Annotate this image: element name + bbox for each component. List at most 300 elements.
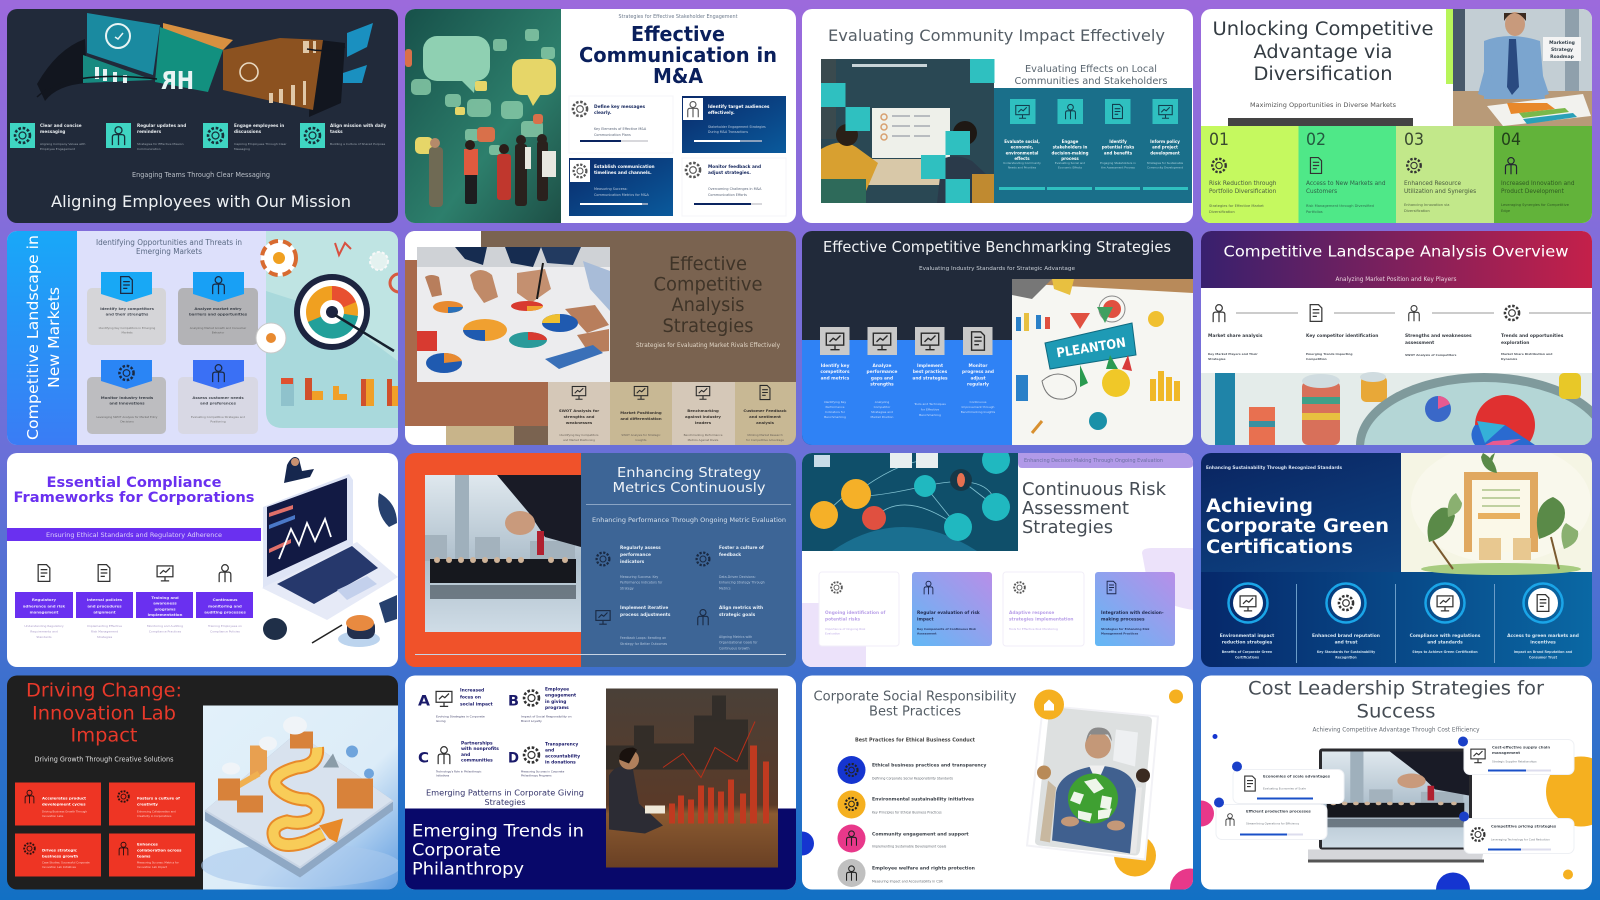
panel: four red action boxes xyxy=(15,782,195,876)
vertical title strip xyxy=(7,231,77,445)
row of four icon items: discussions xyxy=(234,129,262,134)
panel: identify target audiences xyxy=(682,96,786,153)
subheading: Best Practices for Ethical Business Conduct xyxy=(855,738,976,744)
panel: four evaluation items: Engage xyxy=(1062,139,1078,144)
item C xyxy=(418,740,499,778)
subtitle: Strategies for Evaluating Market Rivals Effectively xyxy=(636,342,780,349)
item D: and xyxy=(545,748,554,754)
four benchmarking items: and strategies xyxy=(912,375,948,381)
title: Effective xyxy=(631,22,725,46)
item D: in donations xyxy=(545,760,576,766)
four certification items: and standards xyxy=(1427,640,1463,646)
title: Cost Leadership Strategies for xyxy=(1248,678,1544,700)
four analysis columns: Identifying Key Competitors xyxy=(560,433,598,437)
panel: assess customer needs xyxy=(178,360,258,434)
title: Communication in xyxy=(579,43,777,67)
four metric items: Measuring Success: Key xyxy=(620,575,658,579)
four benchmarking items: gaps and xyxy=(871,375,893,381)
panel: four evaluation items: and project xyxy=(1152,145,1178,150)
image: bent ribbon of teal and brown blocks xyxy=(37,13,373,117)
four metric items: Align metrics with xyxy=(719,606,763,611)
title: Continuous Risk xyxy=(1022,479,1167,500)
callout: competitive pricing: Leveraging Technology for Cost Reduction xyxy=(1491,838,1550,842)
four certification items: and trust xyxy=(1335,640,1357,646)
callout: competitive pricing xyxy=(1459,812,1574,854)
column 04: Increased Innovation and xyxy=(1501,181,1574,187)
title: Philanthropy xyxy=(412,860,524,878)
panel: four red action boxes: business growth xyxy=(42,854,78,858)
item B: in giving xyxy=(545,699,566,705)
panel: four evaluation items: Identify xyxy=(1109,139,1127,144)
title: Driving Change: xyxy=(26,680,182,702)
subtitle: Achieving Competitive Advantage Through Cost Efficiency xyxy=(1312,726,1480,734)
subtitle: Enhancing Performance Through Ongoing Metric Evaluation xyxy=(592,516,786,524)
item A: social impact xyxy=(460,702,493,708)
row of four icon items: messaging xyxy=(40,129,65,134)
four metric items: Enhancing Strategy Through xyxy=(719,581,765,585)
item C: Partnerships xyxy=(461,742,493,746)
four compliance items: Regulatory xyxy=(32,597,56,602)
list of four practices: Defining Corporate Social Responsibility Standards xyxy=(872,776,953,780)
card: Continuous Risk Assessment Strategies xyxy=(802,446,1193,667)
column 04: 04 xyxy=(1501,130,1521,150)
image: network of icon bubbles xyxy=(802,446,1018,551)
panel: integration: making processes xyxy=(1101,616,1145,622)
panel: four red action boxes: Enhancing Collaboration and xyxy=(137,810,176,814)
four benchmarking items: Benchmarking xyxy=(919,413,941,417)
four benchmarking items: Market Position xyxy=(871,415,894,419)
subheading: Communities and Stakeholders xyxy=(1014,76,1168,87)
panel: identify target audiences: During M&A Transactions xyxy=(708,130,748,134)
photo: hands over pie charts xyxy=(417,247,610,382)
panel: four evaluation items: Evaluating Social and xyxy=(1055,161,1085,165)
row of four icon items: Communication xyxy=(137,147,161,151)
four certification items: Enhanced brand reputation xyxy=(1312,634,1380,639)
panel: four red action boxes: Innovation Lab Initiatives xyxy=(42,865,77,869)
panel: define key messages: Define key messages xyxy=(594,105,645,110)
four compliance items: and procedures xyxy=(87,603,122,608)
four benchmarking items: strengths xyxy=(870,382,894,388)
four compliance items: monitoring and xyxy=(208,603,242,608)
panel: monitor feedback: Overcoming Challenges in M&A xyxy=(708,187,762,191)
photo: man overlooking red bar city xyxy=(606,688,778,868)
callout: economies of scale: Evaluating Economies of Scale xyxy=(1263,786,1306,790)
title: Assessment xyxy=(1022,498,1129,519)
four metric items: feedback xyxy=(719,552,741,558)
column 02: Portfolios xyxy=(1306,210,1323,214)
four analysis columns: strengths and xyxy=(564,414,595,419)
panel: four red action boxes: Enhances xyxy=(137,842,158,846)
title: Essential Compliance xyxy=(46,475,222,491)
item C: Technology's Role in Philanthropic xyxy=(436,770,482,774)
four analysis columns: Benchmarking Performance xyxy=(684,433,722,437)
four benchmarking items: progress and xyxy=(962,369,994,375)
card: Achieving Corporate Green Certifications xyxy=(1201,443,1592,667)
timeline of four items: Key competitor identification xyxy=(1306,333,1378,339)
four certification items: Compliance with regulations xyxy=(1410,634,1480,639)
panel: integration xyxy=(1095,572,1175,646)
panel: regular evaluation: Key Components of Continuous Risk xyxy=(917,627,976,631)
panel: regular evaluation: Assessment xyxy=(917,632,937,636)
panel: four red action boxes: Drives strategic xyxy=(42,848,77,852)
list of four practices xyxy=(838,756,986,887)
four metric items: Data-Driven Decisions: xyxy=(719,575,756,579)
panel: monitor industry trends: Leveraging SWOT Analysis for Market Entry xyxy=(97,415,157,419)
item D xyxy=(508,742,580,778)
four benchmarking items: Identify key xyxy=(821,364,849,369)
four compliance items: Internal policies xyxy=(87,597,122,602)
four benchmarking items: Tools and Techniques xyxy=(914,402,946,406)
item C: communities xyxy=(461,758,493,764)
four benchmarking items: Strategies and xyxy=(871,410,893,414)
row of four icon items xyxy=(10,123,387,151)
panel: four red action boxes: Accelerates product xyxy=(42,796,86,800)
panel: four evaluation items: Strategies for Sustainable xyxy=(1147,161,1183,165)
column 03: Utilization and Synergies xyxy=(1404,189,1476,195)
top banner: Enhancing Decision-Making Through Ongoing Evaluation xyxy=(1024,458,1163,464)
panel: establish communication timelines: timelines and channels. xyxy=(594,170,652,176)
title: Corporate Social Responsibility xyxy=(814,690,1017,704)
four benchmarking items: Improvement through xyxy=(962,405,995,409)
panel: four evaluation items: the Assessment Process xyxy=(1101,165,1135,169)
panel: define key messages: Key Elements of Effective M&A xyxy=(594,127,646,131)
title: Competitive xyxy=(654,274,762,296)
column 02 xyxy=(1298,126,1396,223)
panel: four red action boxes: Innovation Labs xyxy=(42,814,64,818)
title: Analysis xyxy=(672,294,744,316)
card: Competitive Landscape Analysis Overview xyxy=(1201,231,1600,517)
subtitle: Driving Growth Through Creative Solutions xyxy=(34,756,174,764)
item B: Employee xyxy=(545,688,569,692)
panel: four red action boxes: Driving Business Growth Through xyxy=(42,810,87,814)
four metric items: strategic goals xyxy=(719,612,756,618)
four benchmarking items: Indicators for xyxy=(825,410,846,414)
timeline of four items xyxy=(1208,305,1591,361)
four metric items: performance xyxy=(620,552,651,558)
panel: adaptive response: Adaptive response xyxy=(1009,611,1054,616)
callout: efficient production: Streamlining Operations for Efficiency xyxy=(1246,822,1299,826)
panel: adaptive response xyxy=(1003,572,1084,646)
panel: ongoing identification: Importance of Ongoing Risk xyxy=(825,627,865,631)
badge: home icon xyxy=(1034,690,1064,720)
four benchmarking items: Identifying Key xyxy=(824,400,846,404)
four metric items: Regularly assess xyxy=(620,546,661,551)
four analysis columns: SWOT Analysis for Strategic xyxy=(621,433,661,437)
callout: supply chain: Strategic Supplier Relationships xyxy=(1492,760,1537,764)
title xyxy=(1214,20,1432,80)
image: whiteboard mind map with PLEANTON box: PLEANTON xyxy=(1055,336,1127,361)
header band xyxy=(1201,231,1592,288)
title: Certifications xyxy=(1206,537,1353,558)
four analysis columns: and Market Positioning xyxy=(563,438,595,442)
four benchmarking items: Monitor xyxy=(969,364,987,369)
subheading xyxy=(1015,64,1167,84)
subheading xyxy=(426,788,584,807)
four certification items: Access to green markets and xyxy=(1507,634,1579,639)
four compliance items: Compliance Policies xyxy=(210,630,240,634)
item C: C xyxy=(418,750,429,766)
top banner xyxy=(1018,453,1193,468)
image: whiteboard mind map with PLEANTON box xyxy=(1012,279,1193,445)
title: Emerging Trends in xyxy=(412,822,584,840)
item D: Philanthropy Programs xyxy=(521,774,552,778)
callout: efficient production: Efficient production processes xyxy=(1246,808,1312,814)
row of four icon items: Align mission with daily xyxy=(330,123,386,128)
column 01: 01 xyxy=(1209,130,1229,150)
title xyxy=(14,475,254,506)
item B xyxy=(508,686,576,723)
panel: four evaluation items: stakeholders in xyxy=(1053,145,1088,150)
panel: four evaluation items: Understanding Community xyxy=(1003,161,1041,165)
panel: regular evaluation xyxy=(912,572,992,646)
item D: D xyxy=(508,750,519,766)
four analysis columns: Metrics Against Rivals xyxy=(688,438,719,442)
panel: four evaluation items: Engaging Stakeholders in xyxy=(1100,161,1136,165)
item C: and xyxy=(461,752,470,758)
row of four icon items: Regular updates and xyxy=(137,123,186,128)
panel: four evaluation items: Needs and Priorities xyxy=(1008,165,1037,169)
card: Effective Competitive Benchmarking Strategies xyxy=(802,231,1193,445)
four certification items: Environmental impact xyxy=(1220,634,1274,639)
column 04 xyxy=(1494,126,1592,223)
callout: economies of scale: Economies of scale advantages xyxy=(1263,774,1331,778)
four compliance items: management xyxy=(30,610,59,615)
image: pie chart dish and cylinders xyxy=(1201,372,1600,517)
title: Evaluating Community Impact Effectively xyxy=(828,26,1165,45)
four certification items: Key Standards for Sustainability xyxy=(1317,650,1375,654)
panel: four evaluation items: development xyxy=(1150,150,1180,155)
four compliance items: Strategies xyxy=(97,635,113,639)
row of four icon items: Building a Culture of Shared Purpose xyxy=(330,142,385,146)
item A xyxy=(418,688,493,723)
four compliance items: programs xyxy=(154,606,176,611)
pre-heading: Enhancing Sustainability Through Recognized Standards xyxy=(1206,465,1342,471)
title: Unlocking Competitive xyxy=(1212,19,1434,40)
four compliance items: Monitoring and Auditing xyxy=(147,624,183,628)
panel: four evaluation items: economic, xyxy=(1011,145,1034,150)
subtitle: Evaluating Industry Standards for Strategic Advantage xyxy=(919,266,1076,272)
list of four practices: Ethical business practices and transparency xyxy=(872,762,986,768)
item A: A xyxy=(418,694,430,710)
four metric items: Continuous Growth xyxy=(719,646,750,650)
panel: monitor industry trends: Decisions xyxy=(120,420,134,424)
card: Driving Change: Innovation Lab Impact xyxy=(7,676,401,890)
four compliance items: Continuous xyxy=(213,597,237,602)
panel: four evaluation items: environmental xyxy=(1006,150,1039,155)
column 03: Enhanced Resource xyxy=(1404,181,1461,187)
title xyxy=(1206,496,1389,558)
four benchmarking items: Continuous xyxy=(970,400,986,404)
callout: supply chain: management xyxy=(1492,750,1520,755)
image: isometric S road platform xyxy=(201,706,401,890)
panel: establish communication timelines xyxy=(569,158,673,216)
title: Diversification xyxy=(1254,64,1393,85)
four benchmarking items: Analyzing xyxy=(875,400,889,404)
item B: B xyxy=(508,694,519,710)
panel: market entry barriers: barriers and opportunities xyxy=(189,312,248,317)
panel: four red action boxes: Innovation Lab Impact xyxy=(137,865,167,869)
four compliance items: alignment xyxy=(93,610,116,615)
list of four practices: Community engagement and support xyxy=(872,832,969,838)
item C: with nonprofits xyxy=(461,746,499,752)
column 03 xyxy=(1396,126,1494,223)
four analysis columns: for Competitive Advantage xyxy=(746,438,784,442)
four metric items: process adjustments xyxy=(620,612,671,618)
four analysis columns: leaders xyxy=(695,420,712,425)
four metric items: Organizational Goals for xyxy=(719,641,758,645)
title: Corporate xyxy=(412,840,501,860)
pre-heading: Strategies for Effective Stakeholder Engagement xyxy=(618,14,738,20)
four analysis columns: SWOT Analysis for xyxy=(559,408,599,413)
four compliance items: Compliance Practices xyxy=(149,630,182,634)
panel: market entry barriers: Analyzing Market Growth and Consumer xyxy=(190,326,246,330)
panel: monitor industry trends xyxy=(87,360,166,434)
title: M&A xyxy=(653,64,703,88)
panel: monitor feedback xyxy=(682,158,786,216)
callout: efficient production xyxy=(1214,798,1327,840)
card: Corporate Social Responsibility Best Practices xyxy=(790,676,1210,900)
accent bars xyxy=(1228,9,1453,126)
title: Enhancing Strategy xyxy=(617,465,761,481)
row of four icon items: Inspiring Employees Through Clear xyxy=(234,142,287,146)
four metric items: Performance Indicators for xyxy=(620,581,663,585)
four certification items: incentives xyxy=(1530,640,1556,646)
item C: Initiatives xyxy=(436,774,450,778)
timeline of four items: Strengths and weaknesses xyxy=(1405,334,1472,339)
header band: Analyzing Market Position and Key Players xyxy=(1336,276,1456,283)
panel: identify target audiences: Stakeholder Engagement Strategies xyxy=(708,125,766,129)
four analysis columns: Benchmarking xyxy=(687,408,719,413)
item B: Impact of Social Responsibility on xyxy=(521,714,571,718)
row of four icon items: reminders xyxy=(137,129,162,134)
panel: identify target audiences: effectively. xyxy=(708,110,735,116)
panel: four evaluation items: process xyxy=(1061,156,1079,161)
four certification items: Consumer Trust xyxy=(1529,656,1558,660)
timeline of four items: Emerging Trends Impacting xyxy=(1306,352,1352,356)
image: people under speech bubbles xyxy=(405,9,561,223)
card: Essential Compliance Frameworks for Corporations xyxy=(7,453,398,667)
panel: adaptive response: strategies implementation xyxy=(1009,616,1073,622)
column 01: Diversification xyxy=(1209,210,1235,214)
icon squares xyxy=(820,327,992,355)
callout: competitive pricing: Competitive pricing strategies xyxy=(1491,824,1557,828)
title: Success xyxy=(1356,702,1436,722)
column 02: 02 xyxy=(1306,130,1326,150)
subtitle: Engaging Teams Through Clear Messaging xyxy=(132,171,270,179)
four compliance items: Risk Management xyxy=(91,630,119,634)
four benchmarking items: competitors xyxy=(820,369,850,375)
four metric items: Feedback Loops: Iterating on xyxy=(620,636,666,640)
column 02: Access to New Markets and xyxy=(1306,181,1386,187)
title xyxy=(612,465,766,496)
panel: assess customer needs: and preferences xyxy=(200,401,237,406)
vertical title strip: New Markets xyxy=(45,287,63,388)
four metric items: Foster a culture of xyxy=(719,546,764,551)
four certification items xyxy=(1220,584,1579,660)
panel: monitor feedback: Monitor feedback and xyxy=(708,165,761,170)
list of four practices: Implementing Sustainable Development Goals xyxy=(872,844,947,848)
panel: four red action boxes: teams xyxy=(137,854,151,858)
column 01: Risk Reduction through xyxy=(1209,181,1276,187)
timeline of four items: exploration xyxy=(1501,340,1529,346)
photo: man with marketing strategy roadmap: Strategy xyxy=(1551,47,1573,53)
photo: hand placing piece above figures xyxy=(425,475,581,632)
four compliance items: auditing processes xyxy=(204,610,246,615)
four metric items: Strategy for Better Outcomes xyxy=(620,642,668,646)
four metric items: Implement iterative xyxy=(620,606,668,611)
four compliance items: adherence and risk xyxy=(23,603,65,608)
panel: assess customer needs: Evaluating Competitive Strategies and xyxy=(191,415,245,419)
four benchmarking items: Analyze xyxy=(873,364,891,369)
panel: four red action boxes: development cycles xyxy=(42,802,86,806)
panel: four evaluation items xyxy=(994,88,1192,203)
list of four practices: Measuring Impact and Accountability in CSR xyxy=(872,880,943,884)
four benchmarking items: adjust xyxy=(970,375,986,381)
panel: assess customer needs: Positioning xyxy=(210,420,226,424)
panel: ongoing identification: potential risks xyxy=(825,616,860,622)
list of four practices: Environmental sustainability initiatives xyxy=(872,796,974,802)
column 02: Customers xyxy=(1306,189,1337,195)
column 04: Leveraging Synergies for Competitive xyxy=(1501,203,1569,207)
panel: regular evaluation: Regular evaluation of risk xyxy=(917,611,980,616)
panel: identify competitors: Identifying Key Competitors in Emerging xyxy=(99,326,155,330)
four benchmarking items xyxy=(820,363,996,419)
four certification items: Impact on Brand Reputation and xyxy=(1514,650,1572,654)
panel: monitor industry trends: Monitor industry trends xyxy=(101,395,153,400)
item D: Measuring Success in Corporate xyxy=(521,770,564,774)
four benchmarking items: regularly xyxy=(967,382,989,388)
four compliance items: implementation xyxy=(148,612,183,617)
title xyxy=(26,680,182,746)
timeline of four items: Market share analysis xyxy=(1208,333,1263,339)
timeline of four items: Strategies xyxy=(1208,357,1226,361)
panel: market entry barriers: Analyze market entry xyxy=(194,306,242,311)
panel: identify competitors: Identify key competitors xyxy=(100,306,154,311)
decorative shapes xyxy=(790,690,1210,900)
item A: Giving xyxy=(436,719,446,723)
four benchmarking items: performance xyxy=(867,369,898,375)
card: Unlocking Competitive Advantage via Diversification xyxy=(1201,9,1592,223)
column 01 xyxy=(1201,126,1298,223)
panel: establish communication timelines: Communication Metrics for M&A xyxy=(594,193,649,197)
image: bent ribbon of teal and brown blocks: HR xyxy=(161,66,194,95)
four analysis columns: and sentiment xyxy=(749,414,781,419)
decorative shapes xyxy=(1188,734,1600,900)
four metric items: indicators xyxy=(620,559,645,565)
panel: ongoing identification: Evaluation xyxy=(825,632,840,636)
item D: Transparency xyxy=(545,742,578,748)
timeline of four items: Competition xyxy=(1306,357,1327,361)
panel: four evaluation items: decision-making xyxy=(1052,150,1089,155)
row of four icon items: Employee Engagement xyxy=(40,147,76,151)
title: Corporate Green xyxy=(1206,516,1389,537)
four benchmarking items: for Effective xyxy=(921,408,939,412)
panel: establish communication timelines: Establish communication xyxy=(594,165,655,170)
title: Impact xyxy=(70,724,138,746)
column 04: Edge xyxy=(1501,209,1511,213)
row of four icon items: tasks xyxy=(330,129,343,134)
item A: focus on xyxy=(460,694,481,700)
four compliance items: Training Employees on xyxy=(208,624,242,628)
title xyxy=(580,26,776,84)
vertical title strip: Competitive Landscape in xyxy=(24,235,42,440)
card: Effective Competitive Analysis Strategies xyxy=(405,231,796,445)
four benchmarking items: Competitor xyxy=(874,405,891,409)
title: Best Practices xyxy=(869,704,961,720)
panel: four red action boxes: Case Studies: Successful Corporate xyxy=(42,860,90,864)
panel: ongoing identification: Ongoing identification of xyxy=(825,611,885,616)
column 04: Product Development xyxy=(1501,189,1565,195)
